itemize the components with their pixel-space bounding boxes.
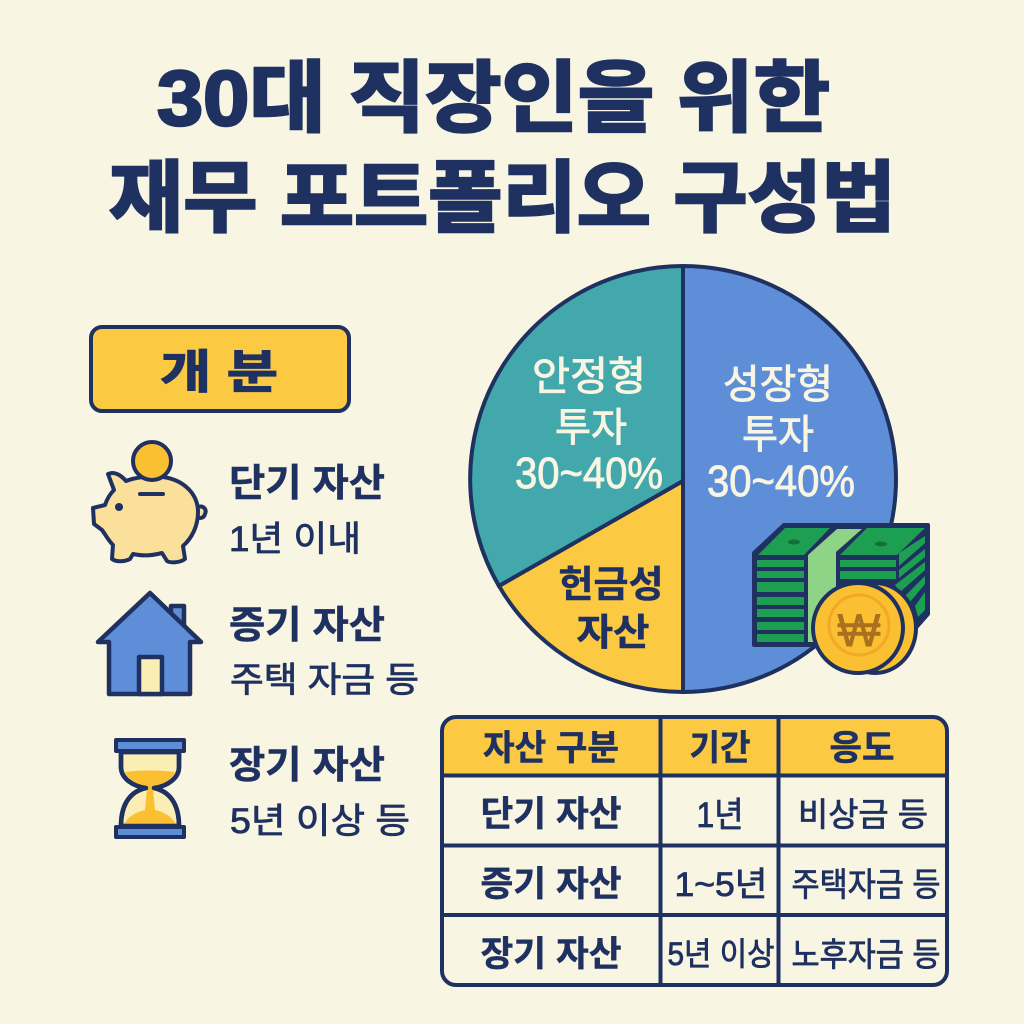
title: 30대 직장인을 위한 — [157, 54, 830, 142]
icon: money stacks and won coin: ₩ — [837, 604, 881, 656]
label: stable investment: 투자 — [555, 406, 627, 450]
text: long-term asset: 5년 이상 등 — [230, 802, 410, 841]
table background — [442, 717, 947, 985]
text: mid-term asset: 주택 자금 등 — [230, 661, 419, 700]
text: long-term asset: 장기 자산 — [229, 745, 385, 787]
table row: long-term: 장기 자산 — [480, 935, 622, 974]
panel: category label: 개 분 — [160, 346, 278, 398]
table header — [442, 717, 947, 775]
table: asset classification — [442, 717, 947, 985]
pie slice: stable investment — [470, 266, 683, 586]
label: growth investment — [707, 363, 855, 506]
pie chart — [470, 266, 896, 692]
won coin front — [813, 583, 903, 673]
text: short-term asset: 1년 이내 — [229, 520, 361, 559]
left cash stack — [754, 525, 928, 645]
text: mid-term asset — [229, 605, 419, 700]
table row: mid-term: 1~5년 — [674, 866, 768, 904]
text: short-term asset: 단기 자산 — [229, 463, 385, 505]
title: 재무 포트폴리오 구성법 — [109, 154, 896, 242]
table row: long-term: 5년 이상 — [668, 936, 774, 972]
table header labels: 자산 구분 — [483, 729, 619, 768]
table row: short-term: 1년 — [696, 796, 744, 835]
table header labels: 응도 — [830, 729, 894, 768]
label: growth investment: 30~40% — [707, 457, 855, 506]
table row: short-term: 비상금 등 — [798, 796, 928, 833]
table header labels: 기간 — [690, 729, 750, 768]
table row: mid-term: 주택자금 등 — [792, 866, 940, 903]
table row: mid-term — [480, 865, 940, 904]
label: growth investment: 투자 — [742, 413, 814, 457]
text: mid-term asset: 증기 자산 — [229, 605, 385, 647]
table row: long-term — [480, 935, 940, 974]
label: growth investment: 성장형 — [723, 363, 833, 407]
table frame and grid — [442, 717, 947, 985]
table row: short-term: 단기 자산 — [480, 795, 622, 834]
label: stable investment: 30~40% — [515, 449, 663, 498]
table row: short-term — [480, 795, 928, 835]
icon: piggy bank with coin — [93, 442, 206, 562]
icon: house — [98, 593, 201, 694]
table header labels — [483, 729, 894, 768]
icon: hourglass — [116, 740, 184, 837]
pie slice: growth investment — [683, 266, 896, 692]
table row: long-term: 노후자금 등 — [792, 936, 940, 973]
title — [109, 54, 896, 242]
label: cash equivalents: 헌금성 — [558, 564, 664, 605]
panel: category label — [91, 327, 349, 411]
text: long-term asset — [229, 745, 410, 841]
won coin back — [834, 583, 916, 673]
label: cash equivalents: 자산 — [576, 612, 650, 653]
label: stable investment — [515, 355, 663, 498]
icon: money stacks and won coin — [754, 525, 928, 673]
label: cash equivalents — [558, 564, 664, 653]
table row: mid-term: 증기 자산 — [480, 865, 622, 904]
pie slice: cash equivalents — [499, 481, 683, 692]
text: short-term asset — [229, 463, 385, 559]
label: stable investment: 안정형 — [532, 355, 646, 399]
